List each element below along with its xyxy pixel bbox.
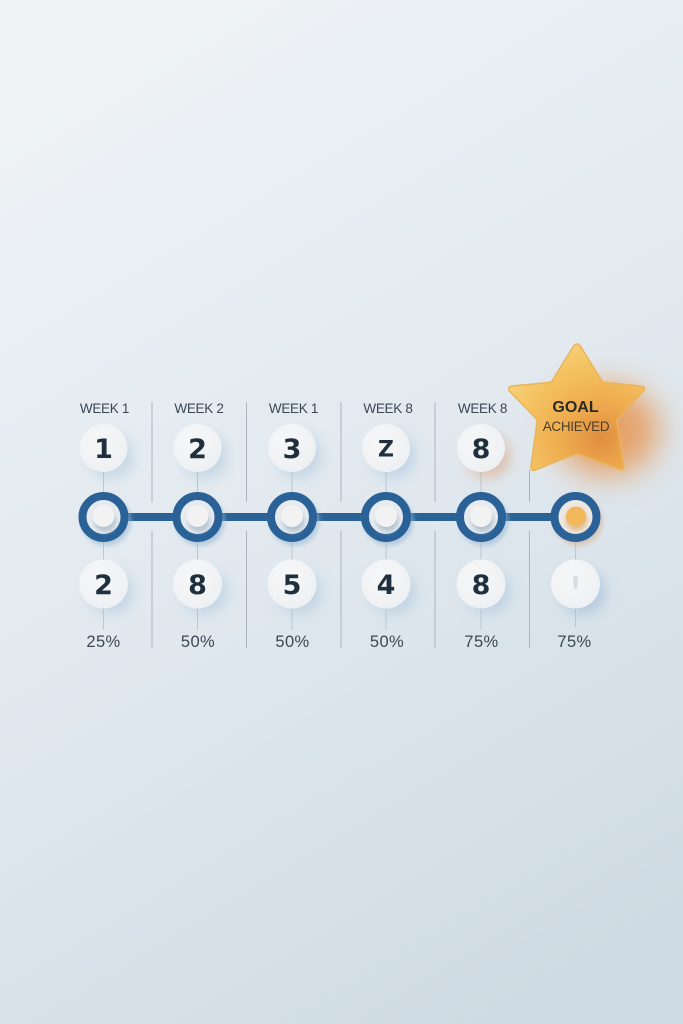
- disc: 8: [456, 560, 510, 614]
- percentage labels: 75%: [464, 633, 499, 651]
- disc: 3: 3: [283, 434, 301, 465]
- node 4: [364, 496, 414, 546]
- node 6: goal: [553, 496, 603, 546]
- disc: 1: [80, 424, 133, 478]
- disc: 5: 5: [283, 570, 301, 601]
- disc: 8: 8: [188, 570, 207, 601]
- disc: 8: 8: [472, 570, 490, 601]
- week labels: WEEK 8: [458, 401, 507, 416]
- top number discs: [80, 424, 510, 478]
- percentage labels: 50%: [370, 633, 404, 651]
- achieved text: ACHIEVED: [543, 419, 610, 434]
- connector line: [104, 513, 574, 521]
- disc: 8: [457, 424, 510, 478]
- week labels: [80, 401, 507, 416]
- week labels: WEEK 1: [80, 401, 129, 416]
- percentage labels: [86, 633, 592, 651]
- disc: 3: [268, 424, 322, 478]
- disc: Z: Z: [378, 438, 394, 462]
- node 2: [175, 496, 225, 546]
- disc: 8: 8: [472, 434, 490, 465]
- disc: 5: [268, 560, 322, 614]
- percentage labels: 50%: [275, 633, 310, 651]
- disc: 8: [173, 560, 227, 614]
- star: goal achieved: [509, 344, 644, 471]
- week labels: WEEK 1: [269, 401, 318, 416]
- percentage labels: 25%: [86, 633, 121, 651]
- week labels: WEEK 2: [174, 401, 224, 416]
- node 5: [458, 496, 508, 546]
- disc: 1: 1: [94, 434, 113, 465]
- week labels: WEEK 8: [363, 401, 413, 416]
- goal text: GOAL: [552, 399, 599, 416]
- disc: 2: 2: [188, 434, 207, 465]
- disc: 4: 4: [377, 570, 395, 601]
- bottom number discs: [79, 560, 605, 614]
- disc: 2: 2: [94, 570, 113, 601]
- disc: 2: [79, 560, 133, 614]
- node 1: [81, 496, 131, 546]
- disc: 4: [362, 560, 416, 614]
- node 3: [270, 496, 320, 546]
- progress nodes: [81, 496, 603, 546]
- percentage labels: 75%: [557, 633, 592, 651]
- stem lines: [104, 472, 576, 630]
- star glow: [555, 384, 659, 476]
- percentage labels: 50%: [181, 633, 215, 651]
- column separators: [152, 402, 530, 648]
- disc: blank: [551, 560, 605, 614]
- disc: 2: [174, 424, 227, 478]
- disc: Z: [362, 424, 416, 478]
